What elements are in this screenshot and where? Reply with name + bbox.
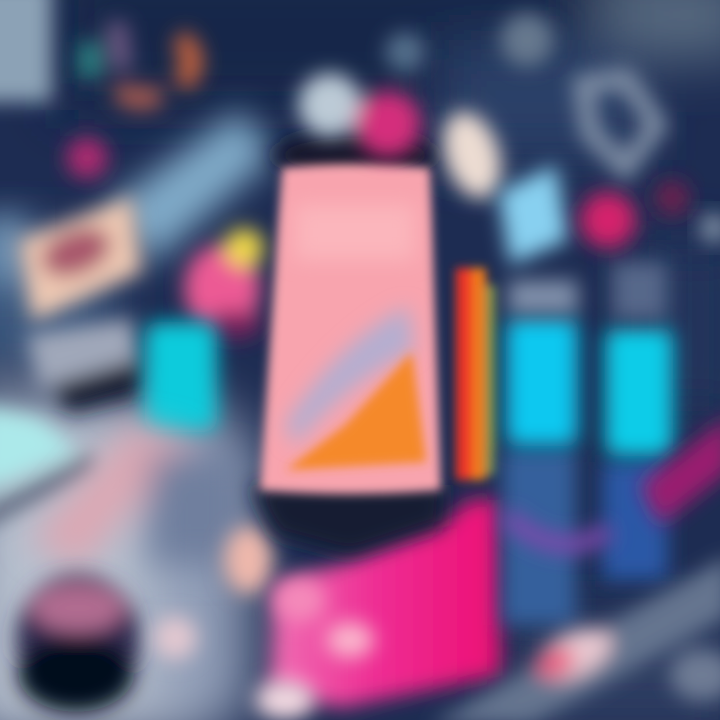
small dot right edge	[699, 213, 720, 243]
phone screen	[260, 164, 441, 494]
purple curve across columns	[505, 415, 720, 544]
grey dot top right	[500, 13, 554, 67]
magenta floor shape	[255, 500, 500, 720]
round dark gauge icon	[16, 574, 140, 712]
light tilted card	[432, 104, 512, 206]
grey device below card	[26, 318, 142, 412]
grey caps above cyan bars	[508, 262, 667, 320]
pink dot right	[580, 192, 636, 248]
grey ring icon	[583, 78, 657, 168]
phone shadow	[250, 485, 445, 555]
small light blobs bottom-left	[153, 526, 272, 660]
orange chart area	[286, 352, 426, 470]
top centre blobs	[298, 32, 425, 157]
blue band left edge	[0, 215, 30, 285]
top-left panel	[0, 0, 52, 102]
icon: pink and yellow blob	[184, 228, 264, 339]
cyan bar left	[145, 322, 217, 432]
bottom right capsule and band	[430, 555, 720, 720]
dark blob above phone	[273, 131, 437, 179]
icon: colourful ring	[90, 22, 192, 99]
light cyan shape left edge	[0, 405, 98, 530]
lilac chart band	[285, 306, 414, 445]
card: tilted note	[18, 196, 142, 322]
rainbow column	[456, 268, 496, 480]
screen heading highlight	[295, 205, 415, 260]
cyan bar right with blue column	[602, 328, 673, 580]
dark pink dot far right	[654, 180, 690, 216]
icon: pink dot top left	[66, 137, 108, 179]
diagonal blue band	[110, 110, 275, 265]
pink diagonal band bottom-left	[30, 425, 245, 570]
cyan bar centre with blue column	[502, 318, 578, 625]
phone	[260, 164, 441, 494]
light blue tilted card	[498, 165, 568, 265]
